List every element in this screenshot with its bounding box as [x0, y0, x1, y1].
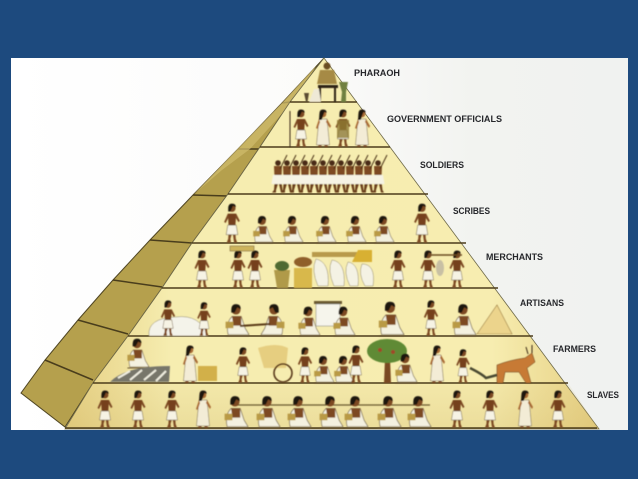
pyramid	[21, 58, 599, 429]
floor lines	[65, 102, 597, 428]
tier labels	[354, 68, 619, 400]
tier 8: slaves	[98, 390, 566, 428]
picture panel	[11, 58, 628, 430]
tier 2: government officials	[290, 110, 370, 147]
label: slaves: SLAVES	[587, 390, 619, 400]
label: soldiers: SOLDIERS	[420, 160, 464, 170]
label: artisans: ARTISANS	[520, 298, 564, 308]
tree	[367, 339, 407, 383]
tier shading	[65, 58, 599, 429]
ox	[470, 345, 535, 383]
pyramid shaded side with stone blocks	[21, 58, 324, 427]
label: government officials: GOVERNMENT OFFICIALS	[387, 114, 502, 124]
tier 7: farmers	[110, 339, 535, 383]
label: pharaoh: PHARAOH	[354, 68, 400, 78]
label: merchants: MERCHANTS	[486, 252, 543, 262]
figures layer	[98, 62, 566, 428]
tier 4: scribes	[224, 204, 430, 243]
tier 1: pharaoh	[304, 62, 348, 102]
tier 6: artisans	[149, 300, 512, 336]
tier 3: soldiers	[272, 155, 387, 193]
tier 5: merchants	[194, 246, 464, 288]
label: scribes: SCRIBES	[453, 206, 490, 216]
pyramid front face	[65, 58, 599, 429]
label: farmers: FARMERS	[553, 344, 596, 354]
